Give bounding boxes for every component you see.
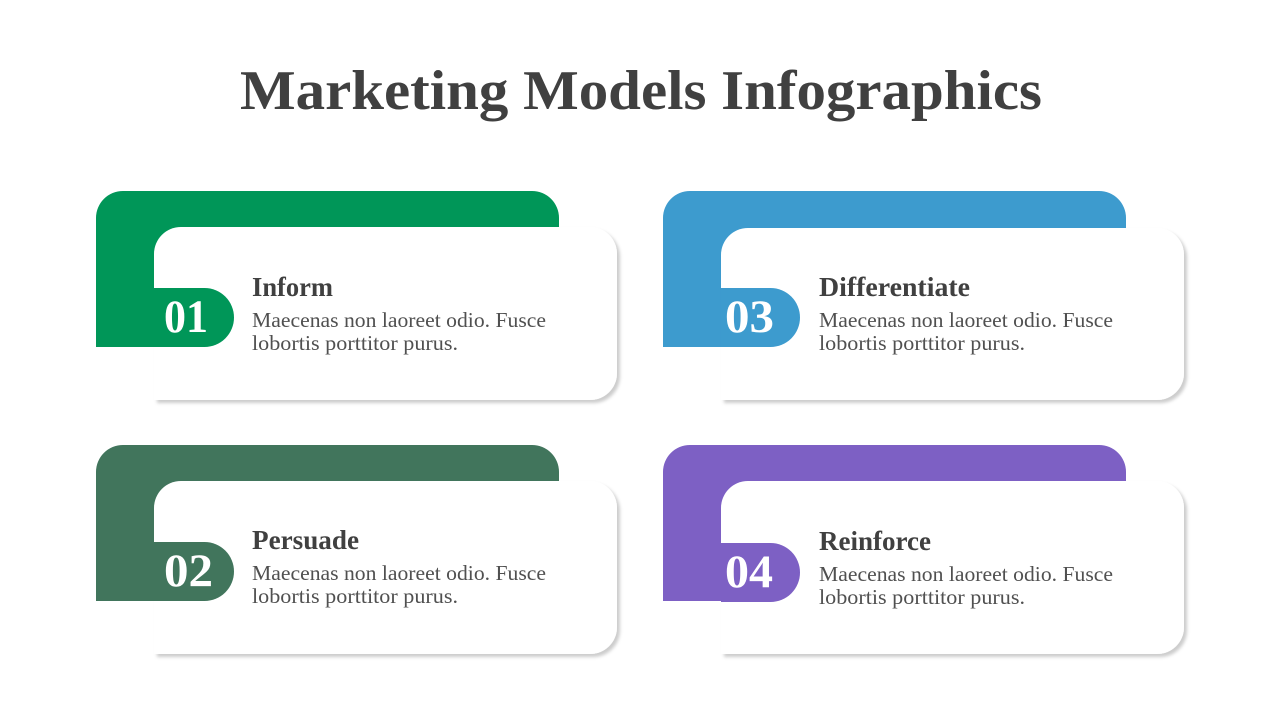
body text [819, 562, 1113, 609]
heading: Reinforce [819, 526, 931, 556]
body text: lobortis porttitor purus. [252, 331, 458, 355]
dark green backing tab [96, 445, 559, 601]
body text: lobortis porttitor purus. [252, 584, 458, 608]
body text: Maecenas non laoreet odio. Fusce [819, 308, 1113, 332]
white card [721, 228, 1184, 400]
body text: Maecenas non laoreet odio. Fusce [252, 561, 546, 585]
body text [252, 561, 546, 608]
panel: 01 Inform [96, 191, 617, 400]
heading: Persuade [252, 525, 359, 555]
body text [819, 308, 1113, 355]
purple backing tab [663, 445, 1126, 601]
white card [154, 227, 617, 400]
number: 01 [164, 291, 208, 343]
number badge [154, 288, 234, 347]
title: Marketing Models Infographics [240, 60, 1042, 122]
panel: 02 Persuade [96, 445, 617, 654]
blue backing tab [663, 191, 1126, 347]
heading: Inform [252, 272, 333, 302]
number: 04 [725, 546, 773, 598]
white card [154, 481, 617, 654]
body text [252, 308, 546, 355]
green backing tab [96, 191, 559, 347]
number: 02 [164, 545, 213, 597]
number badge [721, 543, 800, 602]
body text: Maecenas non laoreet odio. Fusce [252, 308, 546, 332]
number: 03 [725, 291, 774, 343]
body text: lobortis porttitor purus. [819, 585, 1025, 609]
panel: 04 Reinforce [663, 445, 1184, 654]
body text: lobortis porttitor purus. [819, 331, 1025, 355]
body text: Maecenas non laoreet odio. Fusce [819, 562, 1113, 586]
panel: 03 Differentiate [663, 191, 1184, 400]
heading: Differentiate [819, 272, 970, 302]
number badge [721, 288, 800, 347]
number badge [154, 542, 234, 601]
white card [721, 481, 1184, 654]
